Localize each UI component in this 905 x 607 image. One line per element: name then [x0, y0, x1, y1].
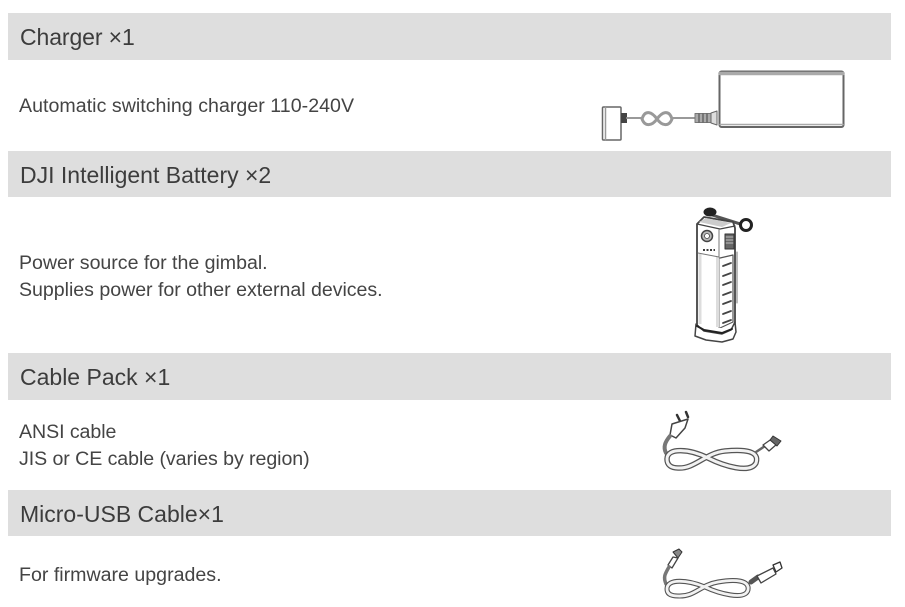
heading: Cable Pack [8, 353, 891, 400]
heading: Micro-USB Cable: Micro-USB Cable×1 [20, 501, 224, 527]
heading: Micro-USB Cable [8, 490, 891, 536]
icon: battery [695, 208, 752, 342]
heading: DJI Intelligent Battery: DJI Intelligent Battery ×2 [20, 162, 271, 188]
heading: Charger: Charger ×1 [20, 24, 135, 50]
text: cable pack description [19, 421, 310, 470]
heading: Charger [8, 13, 891, 60]
text: micro-USB description: For firmware upgrades. [19, 564, 222, 586]
heading: DJI Intelligent Battery [8, 151, 891, 197]
text: battery description: Supplies power for other external devices. [19, 279, 383, 301]
icon: charger [602, 72, 844, 140]
text: battery description [19, 252, 383, 301]
text: cable pack description: JIS or CE cable (varies by region) [19, 448, 310, 470]
text: cable pack description: ANSI cable [19, 421, 116, 443]
icon: ANSI cable [665, 412, 781, 468]
text: charger description: Automatic switching charger 110-240V [19, 95, 354, 117]
heading: Cable Pack: Cable Pack ×1 [20, 364, 170, 390]
icon: micro-USB cable [665, 549, 782, 596]
text: battery description: Power source for the gimbal. [19, 252, 268, 274]
